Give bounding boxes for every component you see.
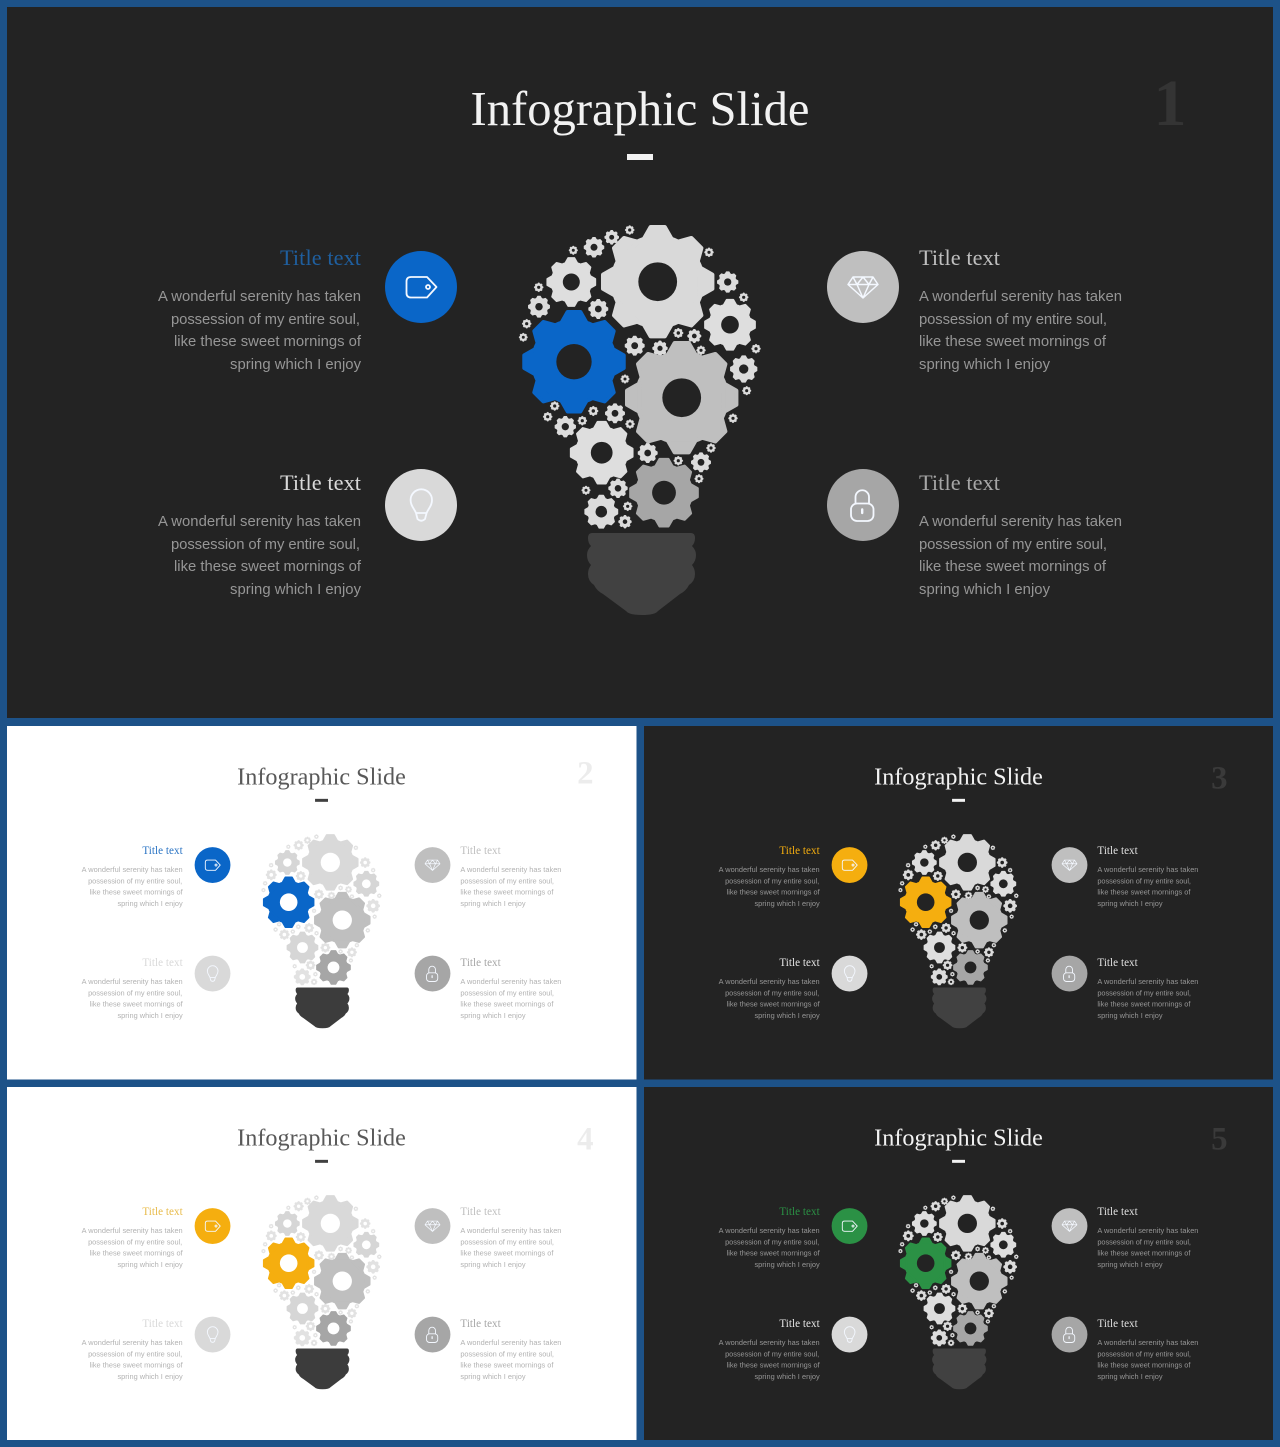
- callout: bottom left: Title text: [779, 1318, 821, 1330]
- callout: top left: [719, 1206, 821, 1269]
- callout: bottom right: Title text: [919, 470, 1001, 495]
- slide number: 5: [1211, 1121, 1228, 1157]
- callout: top left: Title text: [779, 845, 821, 857]
- callout: top left: A wonderful serenity has taken: [158, 289, 361, 305]
- slide 4 content: [82, 1121, 594, 1389]
- callout: top left: A wonderful serenity has taken: [719, 865, 820, 874]
- callout: bottom right: like these sweet mornings of: [1097, 1360, 1191, 1369]
- callout: top right: possession of my entire soul,: [460, 1237, 554, 1246]
- callout: top left: possession of my entire soul,: [725, 876, 819, 885]
- icon: light bulb: [385, 469, 457, 541]
- icon: light bulb: [195, 956, 230, 991]
- callout: top left: Title text: [142, 1206, 184, 1218]
- icon: tag: [832, 1208, 867, 1244]
- callout: top right: like these sweet mornings of: [919, 334, 1107, 350]
- panel: slide 2 white blue: [7, 726, 636, 1080]
- callout: bottom right: A wonderful serenity has taken: [460, 1338, 561, 1347]
- icon: lock: [1052, 956, 1087, 991]
- callout: bottom left: spring which I enjoy: [117, 1372, 183, 1381]
- lightbulb of gears: [519, 225, 761, 615]
- callout: bottom left: A wonderful serenity has taken: [719, 1338, 820, 1347]
- callout: top left: possession of my entire soul,: [88, 876, 182, 885]
- callout: top left: spring which I enjoy: [754, 1260, 820, 1269]
- callout: bottom right: [1097, 1318, 1198, 1381]
- callout: top left: like these sweet mornings of: [727, 887, 821, 896]
- icon: light bulb: [832, 1317, 867, 1352]
- icon: light bulb: [195, 1317, 230, 1352]
- callout: top right: [1097, 845, 1198, 908]
- callout: bottom left: Title text: [779, 957, 821, 969]
- callout: bottom right: spring which I enjoy: [1097, 1011, 1163, 1020]
- slide number: 3: [1211, 760, 1228, 796]
- slide number: 1: [1154, 67, 1186, 140]
- callout: top left: [719, 845, 821, 908]
- callout: top left: Title text: [142, 845, 184, 857]
- callout: top right: spring which I enjoy: [460, 1260, 526, 1269]
- title: Infographic Slide: [237, 1124, 406, 1151]
- callout: bottom left: like these sweet mornings of: [727, 1360, 821, 1369]
- slide number: 4: [577, 1121, 594, 1157]
- callout: bottom left: A wonderful serenity has taken: [158, 514, 361, 530]
- lightbulb of gears: [261, 834, 382, 1028]
- callout: bottom right: spring which I enjoy: [919, 582, 1051, 598]
- callout: top right: A wonderful serenity has taken: [460, 865, 561, 874]
- callout: top right: [460, 1206, 561, 1269]
- callout: top right: Title text: [1097, 1206, 1139, 1218]
- icon: diamond: [1052, 1208, 1087, 1244]
- callout: bottom left: Title text: [280, 470, 362, 495]
- panel: main slide 1: [7, 7, 1273, 718]
- slide 5 content: [719, 1121, 1228, 1389]
- callout: bottom left: A wonderful serenity has taken: [82, 977, 183, 986]
- title underline: [952, 1160, 965, 1163]
- callout: bottom right: like these sweet mornings of: [1097, 999, 1191, 1008]
- callout: top left: like these sweet mornings of: [174, 334, 362, 350]
- callout: bottom right: [460, 957, 561, 1020]
- title underline: [315, 1160, 328, 1163]
- callout: bottom left: possession of my entire soul,: [88, 1349, 182, 1358]
- callout: top right: like these sweet mornings of: [460, 887, 554, 896]
- lightbulb of gears: [898, 834, 1019, 1028]
- icon: lock: [827, 469, 899, 541]
- callout: bottom left: like these sweet mornings of: [90, 999, 184, 1008]
- callout: bottom right: possession of my entire soul,: [1097, 988, 1191, 997]
- callout: top left: Title text: [280, 245, 362, 270]
- callout: bottom left: A wonderful serenity has taken: [82, 1338, 183, 1347]
- callout: bottom left: Title text: [142, 1318, 184, 1330]
- callout: top right: Title text: [919, 245, 1001, 270]
- callout: bottom left: like these sweet mornings of: [90, 1360, 184, 1369]
- callout: top right: like these sweet mornings of: [460, 1248, 554, 1257]
- icon: diamond: [1052, 847, 1087, 883]
- callout: top right: Title text: [460, 1206, 502, 1218]
- callout: bottom right: spring which I enjoy: [460, 1011, 526, 1020]
- icon: diamond: [415, 1208, 450, 1244]
- slide 1 content: [158, 67, 1186, 615]
- callout: bottom left: [158, 470, 362, 598]
- callout: top left: A wonderful serenity has taken: [82, 1226, 183, 1235]
- icon: tag: [832, 847, 867, 883]
- callout: top left: [158, 245, 362, 373]
- lightbulb of gears: [898, 1195, 1019, 1389]
- callout: bottom left: possession of my entire soul,: [725, 1349, 819, 1358]
- callout: bottom right: like these sweet mornings of: [460, 1360, 554, 1369]
- callout: top left: [82, 1206, 184, 1269]
- callout: bottom right: A wonderful serenity has taken: [919, 514, 1122, 530]
- icon: lock: [415, 1317, 450, 1352]
- callout: top left: possession of my entire soul,: [171, 312, 360, 328]
- callout: bottom left: possession of my entire soul,: [171, 537, 360, 553]
- panel: slide 5 dark green: [644, 1087, 1273, 1440]
- callout: top right: possession of my entire soul,: [1097, 1237, 1191, 1246]
- callout: bottom right: possession of my entire soul,: [460, 988, 554, 997]
- callout: bottom right: A wonderful serenity has taken: [460, 977, 561, 986]
- callout: top left: spring which I enjoy: [754, 899, 820, 908]
- panel: slide 4 white yellow: [7, 1087, 636, 1440]
- callout: top left: like these sweet mornings of: [727, 1248, 821, 1257]
- callout: bottom left: [719, 1318, 821, 1381]
- callout: bottom right: Title text: [1097, 957, 1139, 969]
- slide 2 content: [82, 755, 594, 1028]
- icon: diamond: [415, 847, 450, 883]
- callout: bottom right: like these sweet mornings of: [919, 559, 1107, 575]
- title underline: [315, 799, 328, 802]
- callout: top right: spring which I enjoy: [460, 899, 526, 908]
- title: Infographic Slide: [874, 763, 1043, 790]
- callout: bottom left: spring which I enjoy: [754, 1372, 820, 1381]
- callout: bottom left: A wonderful serenity has taken: [719, 977, 820, 986]
- callout: bottom right: possession of my entire soul,: [1097, 1349, 1191, 1358]
- callout: top left: Title text: [779, 1206, 821, 1218]
- lightbulb of gears: [261, 1195, 382, 1389]
- title underline: [627, 154, 653, 160]
- callout: top right: Title text: [1097, 845, 1139, 857]
- callout: top right: A wonderful serenity has taken: [919, 289, 1122, 305]
- callout: bottom left: possession of my entire soul,: [88, 988, 182, 997]
- icon: diamond: [827, 251, 899, 323]
- callout: bottom right: [919, 470, 1122, 598]
- callout: bottom right: spring which I enjoy: [1097, 1372, 1163, 1381]
- callout: bottom right: like these sweet mornings of: [460, 999, 554, 1008]
- callout: top left: A wonderful serenity has taken: [719, 1226, 820, 1235]
- slide number: 2: [577, 755, 594, 791]
- callout: top right: [1097, 1206, 1198, 1269]
- callout: bottom right: Title text: [460, 957, 502, 969]
- callout: bottom right: A wonderful serenity has taken: [1097, 977, 1198, 986]
- callout: bottom right: A wonderful serenity has taken: [1097, 1338, 1198, 1347]
- callout: top right: [460, 845, 561, 908]
- callout: top left: like these sweet mornings of: [90, 887, 184, 896]
- callout: bottom right: [1097, 957, 1198, 1020]
- icon: lock: [1052, 1317, 1087, 1352]
- icon: tag: [195, 847, 230, 883]
- callout: top right: like these sweet mornings of: [1097, 887, 1191, 896]
- callout: bottom left: spring which I enjoy: [754, 1011, 820, 1020]
- callout: top right: spring which I enjoy: [1097, 1260, 1163, 1269]
- callout: bottom right: [460, 1318, 561, 1381]
- icon: lock: [415, 956, 450, 991]
- callout: top right: spring which I enjoy: [1097, 899, 1163, 908]
- callout: bottom left: [82, 1318, 184, 1381]
- callout: bottom left: [719, 957, 821, 1020]
- callout: bottom left: spring which I enjoy: [117, 1011, 183, 1020]
- callout: bottom left: like these sweet mornings of: [174, 559, 362, 575]
- callout: top right: possession of my entire soul,: [460, 876, 554, 885]
- callout: top right: A wonderful serenity has taken: [1097, 1226, 1198, 1235]
- icon: tag: [195, 1208, 230, 1244]
- callout: bottom left: Title text: [142, 957, 184, 969]
- callout: top left: spring which I enjoy: [230, 357, 362, 373]
- callout: bottom left: [82, 957, 184, 1020]
- callout: top right: spring which I enjoy: [919, 357, 1051, 373]
- callout: bottom right: possession of my entire soul,: [460, 1349, 554, 1358]
- callout: top right: possession of my entire soul,: [919, 312, 1107, 328]
- callout: bottom right: Title text: [460, 1318, 502, 1330]
- callout: top left: A wonderful serenity has taken: [82, 865, 183, 874]
- callout: bottom right: Title text: [1097, 1318, 1139, 1330]
- callout: top left: [82, 845, 184, 908]
- callout: bottom left: possession of my entire soul,: [725, 988, 819, 997]
- callout: top right: A wonderful serenity has taken: [460, 1226, 561, 1235]
- slide 3 content: [719, 760, 1228, 1028]
- callout: top left: like these sweet mornings of: [90, 1248, 184, 1257]
- callout: top right: Title text: [460, 845, 502, 857]
- callout: top right: possession of my entire soul,: [1097, 876, 1191, 885]
- callout: top left: spring which I enjoy: [117, 1260, 183, 1269]
- icon: light bulb: [832, 956, 867, 991]
- callout: top right: A wonderful serenity has taken: [1097, 865, 1198, 874]
- callout: top left: spring which I enjoy: [117, 899, 183, 908]
- title: Infographic Slide: [874, 1124, 1043, 1151]
- title: Infographic Slide: [237, 763, 406, 790]
- callout: bottom left: like these sweet mornings of: [727, 999, 821, 1008]
- callout: bottom left: spring which I enjoy: [230, 582, 362, 598]
- panel: slide 3 dark yellow: [644, 726, 1273, 1080]
- callout: top right: [919, 245, 1122, 373]
- callout: top left: possession of my entire soul,: [88, 1237, 182, 1246]
- callout: bottom right: possession of my entire soul,: [919, 537, 1107, 553]
- title: Infographic Slide: [470, 82, 810, 136]
- callout: top left: possession of my entire soul,: [725, 1237, 819, 1246]
- title underline: [952, 799, 965, 802]
- callout: bottom right: spring which I enjoy: [460, 1372, 526, 1381]
- icon: tag: [385, 251, 457, 323]
- callout: top right: like these sweet mornings of: [1097, 1248, 1191, 1257]
